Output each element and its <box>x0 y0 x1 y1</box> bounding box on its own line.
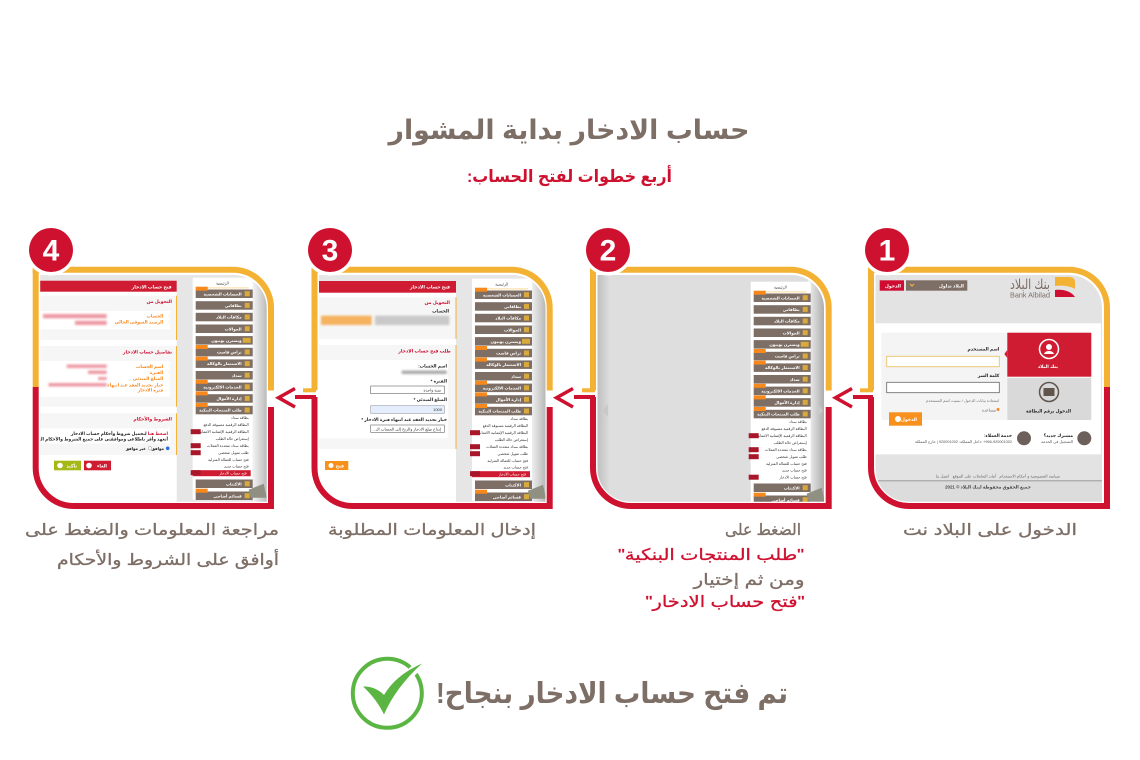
screenshot: bank menu: قسائم أضاحي <box>771 497 800 502</box>
screenshot: open savings account form: الحوالات <box>504 327 522 332</box>
screenshot: review and confirm: بطاقاتي <box>225 303 242 308</box>
screenshot: review and confirm: تأكيد <box>66 462 77 468</box>
screenshot: review and confirm: سداد <box>232 373 242 378</box>
step badge 4 <box>26 224 76 276</box>
step badge 4: 4 <box>43 234 60 268</box>
screenshot: review and confirm: الفترة <box>150 370 164 375</box>
screenshot: bank menu: الحوالات <box>783 330 800 335</box>
screenshot: review and confirm: موافق <box>151 446 165 451</box>
screenshot: bank menu: إستعراض حالة الطلب <box>774 441 807 446</box>
screenshot: open savings account form: الحسابات الشخصية <box>483 292 522 297</box>
screenshot: open savings account form: طلب تمويل شخصي <box>498 452 528 456</box>
step badge 2: 2 <box>600 234 616 268</box>
screenshot: review and confirm: خيار تجديد العقد عند انتهاء <box>107 382 163 388</box>
screenshot: open savings account form: فتح حساب الادخار <box>409 284 450 290</box>
screenshot: bank login page: بنك البلاد <box>1038 364 1058 369</box>
screenshot: review and confirm: الرئيسية <box>216 282 229 286</box>
screenshot: review and confirm: البطاقة الرقمية الإئتمانية الائتمانية <box>198 430 249 435</box>
screenshot: open savings account form: المبلغ المبدئي *‏ <box>414 397 447 402</box>
screenshot: bank menu: الاستثمار بالوكالة <box>765 365 800 370</box>
screenshot: review and confirm: فتح حساب الادخار <box>131 284 172 290</box>
step badge 1: 1 <box>879 234 895 268</box>
screenshot: review and confirm: الشروط والأحكام <box>133 416 172 422</box>
screenshot: review and confirm <box>40 275 267 502</box>
screenshot: bank login page: بنك البلاد <box>1010 276 1050 292</box>
caption 3: إدخال المعلومات المطلوبة <box>328 522 536 540</box>
screenshot: review and confirm: الاكتتاب <box>226 481 242 486</box>
screenshot: bank login page: البلاد تداول <box>939 284 964 290</box>
screenshot: review and confirm: تفاصيل حساب الادخار <box>122 350 172 354</box>
caption 4 <box>25 522 279 570</box>
screenshot: bank login page: سياسة الخصوصية و أحكام الاستخدام أمان التعاملات على الموقع اتصل بنا <box>936 474 1061 478</box>
screenshot: bank login page: الدخول برقم البطاقة <box>1026 408 1071 414</box>
screenshot: review and confirm: مكافآت البلاد <box>216 315 242 320</box>
arrow: step 2 to 3 <box>556 388 573 407</box>
screenshot: review and confirm: فتح حساب الادخار <box>218 472 247 476</box>
caption 1: الدخول على البلاد نت <box>903 522 1077 540</box>
title: حساب الادخار بداية المشوار <box>387 115 750 146</box>
screenshot: review and confirm: أتعهد وأقر باطلاعي وموافقتي على جميع الشروط والأحكام المذكورة <box>25 436 169 442</box>
screenshot: bank login page: الدخول <box>901 417 917 423</box>
screenshot: open savings account form: اسم الحساب:‏ <box>418 364 447 368</box>
screenshot: open savings account form: الاستثمار بالوكالة <box>486 362 522 367</box>
frame: red bottom <box>574 397 829 506</box>
screenshot: open savings account form: خيار تجديد العقد عند انتهاء فترة الادخار *‏ <box>361 417 447 422</box>
screenshot: review and confirm: الحسابات الشخصية <box>204 291 242 296</box>
step badge 1 <box>862 224 912 276</box>
screenshot: bank login page: مشترك جديد؟ <box>1044 433 1073 438</box>
screenshot: open savings account form: طلب المنتجات البنكية <box>478 409 521 414</box>
screenshot: review and confirm: الحساب <box>146 314 164 318</box>
screenshot: bank menu: ويسترن يونيون <box>769 342 800 347</box>
screenshot: open savings account form: تراس فاست <box>496 351 521 356</box>
screenshot: review and confirm: الحوالات <box>225 326 242 331</box>
screenshot: bank login page: مساعدة <box>982 408 996 412</box>
screenshot: bank menu: البطاقة الرقمية الإئتمانية الائتمانية <box>756 434 807 439</box>
screenshot: bank login page: كلمة السر <box>977 373 1000 378</box>
screenshot: bank menu: طلب المنتجات البنكية <box>757 412 800 417</box>
screenshot: review and confirm: طلب تمويل شخصي <box>218 451 249 455</box>
caption 4: مراجعة المعلومات والضغط على <box>25 522 279 540</box>
screenshot: open savings account form: بطاقة سداد متعددة العملات <box>486 445 528 449</box>
screenshot: bank login page: اسم المستخدم <box>968 346 1000 352</box>
screenshot: open savings account form: سنة واحدة <box>423 388 442 392</box>
screenshot: bank menu: البطاقة الرقمية مسبوقة الدفع <box>761 427 807 431</box>
frame: red bottom <box>853 387 1107 506</box>
caption 2: الضغط على <box>725 522 801 539</box>
screenshot: open savings account form: الحساب <box>432 308 449 314</box>
screenshot: review and confirm: طلب المنتجات البنكية <box>199 408 242 413</box>
screenshot: open savings account form: مكافآت البلاد <box>495 316 521 321</box>
screenshot: review and confirm: فترة الادخار <box>137 388 163 392</box>
screenshot: review and confirm: اضغط هنا لتحميل شروط وأحكام حساب الادخار <box>70 430 169 436</box>
screenshot: bank menu: طلب تمويل شخصي <box>776 455 807 459</box>
caption 2: ومن ثم إختيار <box>692 572 804 590</box>
caption 4: أوافق على الشروط والأحكام <box>57 549 279 570</box>
step badge 3 <box>304 224 356 276</box>
screenshot: bank login page: استعادة بيانات الدخول / نسيت اسم المستخدم <box>926 398 999 403</box>
panel: step 2 menu <box>574 270 833 510</box>
screenshot: review and confirm: التحويل من <box>147 299 172 304</box>
caption 2: "فتح حساب الادخار" <box>646 594 804 612</box>
screenshot: bank menu: فتح حساب جديد <box>782 469 807 473</box>
screenshot: open savings account form: ويسترن يونيون <box>491 339 521 344</box>
screenshot: open savings account form: إدارة الأموال <box>496 397 522 402</box>
screenshot: review and confirm: الخدمات الالكترونية <box>203 384 242 389</box>
caption 2: "طلب المنتجات البنكية" <box>618 547 804 564</box>
arrow: step 1 to 2 <box>836 388 852 407</box>
screenshot: bank login page: خدمة العملاء:‏ <box>984 433 1012 438</box>
screenshot: open savings account form: طلب فتح حساب الادخار <box>397 348 451 354</box>
screenshot: review and confirm: الرصيد السوقي الحالي <box>115 320 164 324</box>
screenshot: open savings account form: إستعراض حالة الطلب <box>495 438 528 443</box>
screenshot: open savings account form: بطاقاتي <box>504 304 521 309</box>
frame: red bottom <box>36 387 271 506</box>
screenshot: review and confirm: قسائم أضاحي <box>213 493 242 498</box>
screenshot: review and confirm: الغاء <box>97 464 107 468</box>
screenshot: open savings account form: سداد <box>511 374 521 379</box>
screenshot: open savings account form: البطاقة الرقمية مسبوقة الدفع <box>483 424 528 428</box>
screenshot: open savings account form <box>319 275 546 502</box>
screenshot: bank login page: داخل المملكة: 920001002 | خارج المملكة: ‎+966-920001002 <box>915 440 1012 444</box>
screenshot: bank menu: الحسابات الشخصية <box>762 295 800 300</box>
panel: step 3 form <box>295 270 554 510</box>
screenshot: review and confirm: فتح حساب للعمالة المنزلية <box>208 458 249 462</box>
screenshot: bank menu: تراس فاست <box>775 354 800 359</box>
screenshot: bank login page: جميع الحقوق محفوظة لبنك البلاد © 2021 <box>945 484 1031 490</box>
screenshot: review and confirm: بطاقة سداد <box>231 416 249 420</box>
screenshot: review and confirm: بطاقة سداد متعددة العملات <box>207 444 249 448</box>
screenshot: bank menu: فتح حساب الادخار <box>778 476 807 480</box>
screenshot: bank menu <box>598 275 824 502</box>
screenshot: open savings account form: إيداع مبلغ الادخار والربح إلى الحساب ال...‏ <box>372 426 441 432</box>
screenshot: open savings account form: قسائم أضاحي <box>493 494 521 499</box>
screenshot: open savings account form: الفترة *‏ <box>431 378 447 384</box>
screenshot: review and confirm: ويسترن يونيون <box>211 338 242 343</box>
screenshot: open savings account form: الخدمات الالكترونية <box>483 385 522 390</box>
screenshot: open savings account form: بطاقة سداد <box>510 417 528 421</box>
screenshot: bank login page: Bank Albilad <box>1010 290 1050 300</box>
screenshot: bank menu: الرئيسية <box>774 286 787 290</box>
screenshot: review and confirm: فتح حساب جديد <box>224 465 249 469</box>
screenshot: bank login page: الدخول <box>885 284 901 290</box>
screenshot: bank login page: التسجيل في الخدمة <box>1041 439 1073 444</box>
icon: green check in circle <box>353 659 422 728</box>
screenshot: open savings account form: البطاقة الرقمية الإئتمانية الائتمانية <box>477 431 528 436</box>
screenshot: review and confirm: غير موافق <box>125 446 146 451</box>
caption 2 <box>618 522 804 612</box>
screenshot: bank menu: بطاقة سداد <box>789 420 807 424</box>
panel: step 1 login <box>853 270 1111 510</box>
screenshot: bank menu: إدارة الأموال <box>774 400 800 405</box>
screenshot: open savings account form: الرئيسية <box>495 283 508 287</box>
screenshot: open savings account form: الاكتتاب <box>505 482 522 487</box>
screenshot: open savings account form: فتح حساب الادخار <box>498 473 526 477</box>
frame: yellow top <box>860 270 1107 390</box>
success message: تم فتح حساب الادخار بنجاح! <box>436 678 788 710</box>
screenshot: review and confirm: إستعراض حالة الطلب <box>216 437 249 442</box>
subtitle: أربع خطوات لفتح الحساب: <box>467 165 672 187</box>
screenshot: bank menu: بطاقة سداد متعددة العملات <box>765 448 807 452</box>
screenshot: bank menu: سداد <box>790 377 800 382</box>
frame: red bottom <box>295 397 550 506</box>
frame: yellow top <box>582 270 829 390</box>
screenshot: open savings account form: التحويل من <box>425 300 450 305</box>
frame: yellow top <box>33 270 271 390</box>
frame: yellow top <box>303 270 550 390</box>
step badge 2 <box>582 224 634 276</box>
panel: step 4 review <box>25 270 275 510</box>
screenshot: review and confirm: المبلغ المبدئي <box>133 376 164 381</box>
screenshot: bank login page <box>876 275 1102 502</box>
screenshot: review and confirm: إدارة الأموال <box>216 396 242 401</box>
screenshot: review and confirm: الاستثمار بالوكالة <box>207 361 242 366</box>
screenshot: review and confirm: اسم الحساب <box>136 364 164 369</box>
screenshot: bank menu: الخدمات الالكترونية <box>761 388 800 393</box>
screenshot: open savings account form: فتح <box>336 464 344 468</box>
screenshot: bank menu: مكافآت البلاد <box>774 319 800 324</box>
screenshot: open savings account form: 1000 <box>433 407 443 412</box>
screenshot: bank menu: فتح حساب للعمالة المنزلية <box>766 462 807 466</box>
screenshot: review and confirm: تراس فاست <box>217 350 242 355</box>
step badge 3: 3 <box>322 234 338 268</box>
screenshot: review and confirm: البطاقة الرقمية مسبوقة الدفع <box>203 423 249 427</box>
screenshot: bank menu: بطاقاتي <box>783 307 800 312</box>
screenshot: bank menu: الاكتتاب <box>784 485 800 490</box>
screenshot: open savings account form: فتح حساب جديد <box>503 466 528 470</box>
screenshot: open savings account form: فتح حساب للعمالة المنزلية <box>487 459 528 463</box>
arrow: step 3 to 4 <box>278 388 295 407</box>
